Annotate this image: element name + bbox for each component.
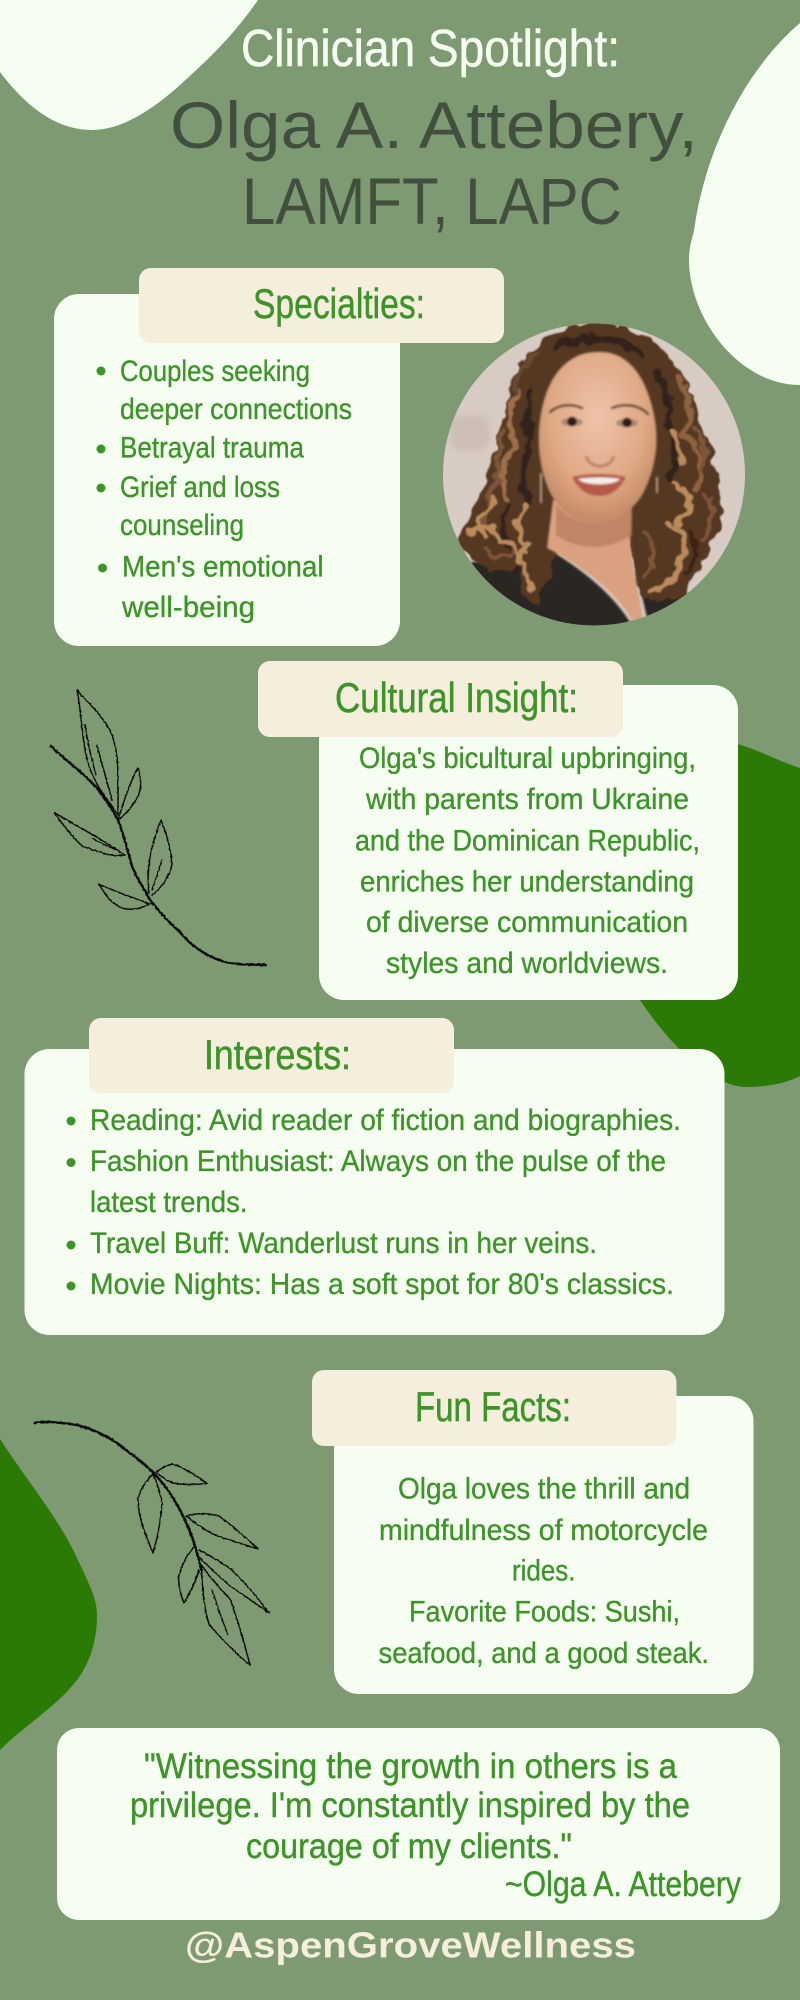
text block: quote bbox=[130, 1747, 741, 1904]
photo: portrait of clinician bbox=[440, 320, 750, 640]
panel background bbox=[334, 1396, 754, 1694]
list: interests bbox=[66, 1104, 681, 1301]
heading: credentials: LAMFT, LAPC bbox=[242, 164, 622, 238]
blob: right dark green bbox=[640, 741, 800, 1087]
blob: top right bbox=[689, 23, 800, 385]
text block: fun facts bbox=[378, 1472, 709, 1670]
text block: fun facts: seafood, and a good steak. bbox=[378, 1637, 709, 1670]
hair bbox=[458, 323, 722, 601]
list: interests: Reading: Avid reader of fiction and biographies. bbox=[90, 1104, 681, 1137]
panel background bbox=[57, 1728, 780, 1920]
text block: quote: courage of my clients." bbox=[246, 1827, 572, 1866]
text block: cultural insight: of diverse communication bbox=[366, 906, 688, 939]
text block: fun facts: Olga loves the thrill and bbox=[398, 1472, 690, 1505]
eyebrows bbox=[550, 405, 648, 414]
heading tab: Interests: bbox=[204, 1031, 351, 1078]
hoop earrings bbox=[541, 473, 657, 503]
heading tab bbox=[139, 268, 504, 343]
illustration: leaf sprig two bbox=[35, 1422, 269, 1665]
heading: clinician spotlight: Clinician Spotlight: bbox=[241, 20, 620, 78]
text block: quote: "Witnessing the growth in others is a bbox=[144, 1747, 678, 1786]
illustration: leaf sprig one bbox=[51, 690, 266, 965]
neck shadow bbox=[556, 505, 632, 547]
heading: clinician name: Olga A. Attebery, bbox=[170, 88, 698, 162]
nose bbox=[586, 456, 614, 466]
heading tab bbox=[89, 1018, 454, 1093]
panel: quote bbox=[57, 1728, 780, 1920]
face bbox=[539, 352, 657, 523]
list: specialties: Men's emotional bbox=[122, 551, 324, 584]
neck and chest bbox=[547, 500, 643, 620]
list: specialties: Grief and loss bbox=[120, 471, 280, 504]
text block: cultural insight bbox=[355, 742, 700, 980]
panel background bbox=[54, 294, 400, 646]
list: specialties: counseling bbox=[120, 509, 244, 542]
text block: cultural insight: and the Dominican Republic, bbox=[355, 824, 700, 858]
blob: left dark green bbox=[0, 1439, 97, 1750]
heading tab bbox=[312, 1370, 676, 1446]
text block: fun facts: mindfulness of motorcycle bbox=[379, 1514, 708, 1547]
title bbox=[170, 20, 698, 238]
eyes bbox=[561, 416, 638, 428]
text block: cultural insight: styles and worldviews. bbox=[386, 947, 668, 980]
panel background bbox=[319, 685, 738, 1000]
list: specialties: Betrayal trauma bbox=[120, 432, 304, 464]
text block: quote: ~Olga A. Attebery bbox=[505, 1865, 741, 1904]
panel: specialties bbox=[54, 268, 504, 646]
hair curls bbox=[468, 338, 712, 590]
text block: cultural insight: with parents from Ukraine bbox=[365, 783, 689, 816]
heading tab: Fun Facts: bbox=[415, 1383, 571, 1430]
list: specialties bbox=[96, 355, 352, 624]
heading tab bbox=[258, 661, 623, 737]
blob: top left bbox=[0, 0, 258, 130]
panel background bbox=[24, 1049, 724, 1335]
heading tab: Specialties: bbox=[253, 280, 425, 327]
panel: fun facts bbox=[312, 1370, 754, 1694]
panel: cultural insight bbox=[258, 661, 738, 1000]
text block: fun facts: Favorite Foods: Sushi, bbox=[409, 1596, 680, 1629]
list: specialties: deeper connections bbox=[120, 393, 352, 426]
list: interests: Travel Buff: Wanderlust runs in her veins. bbox=[90, 1227, 597, 1260]
panel: interests bbox=[24, 1018, 724, 1335]
list: specialties: well-being bbox=[121, 591, 255, 624]
text block: fun facts: rides. bbox=[512, 1554, 576, 1588]
heading tab: Cultural Insight: bbox=[335, 674, 578, 721]
list: interests: latest trends. bbox=[90, 1186, 248, 1219]
text block: quote: privilege. I'm constantly inspired by the bbox=[130, 1786, 690, 1825]
text block: cultural insight: Olga's bicultural upbringing, bbox=[359, 742, 696, 775]
list: specialties: Couples seeking bbox=[120, 355, 310, 388]
text block: cultural insight: enriches her understanding bbox=[360, 866, 694, 898]
list: interests: Movie Nights: Has a soft spot for 80's classics. bbox=[90, 1268, 674, 1301]
footer handle: @AspenGroveWellness bbox=[185, 1924, 636, 1965]
list: interests: Fashion Enthusiast: Always on the pulse of the bbox=[90, 1145, 666, 1178]
mouth bbox=[572, 474, 626, 496]
blouse bbox=[470, 545, 688, 626]
